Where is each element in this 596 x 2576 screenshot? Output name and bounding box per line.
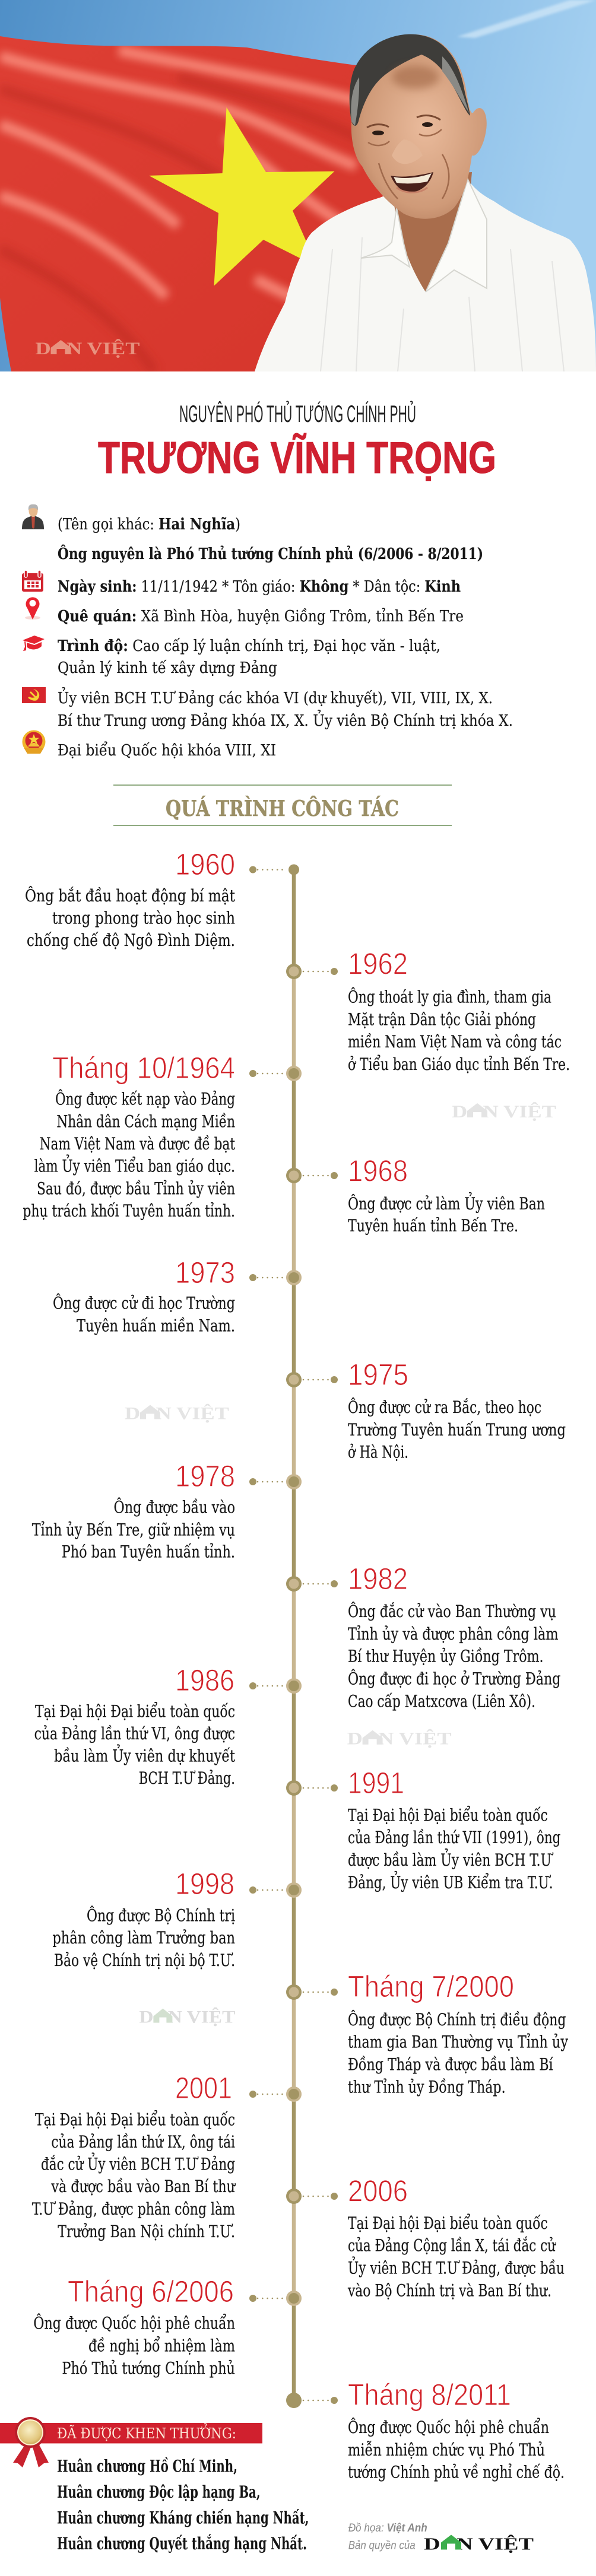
shirt <box>255 179 596 371</box>
credits <box>348 2522 534 2554</box>
waving flag <box>0 30 392 374</box>
timeline entry: 1986: của Đảng lần thứ VI, ông được <box>34 1724 235 1743</box>
timeline entry: 1998: 1998 <box>175 1867 234 1901</box>
timeline entry: June 2006: đề nghị bổ nhiệm làm <box>88 2336 235 2356</box>
timeline entry: 1975 <box>348 1358 566 1462</box>
timeline entry: 1960: trong phong trào học sinh <box>52 908 235 928</box>
timeline entry: July 2000 <box>348 1970 568 2097</box>
icon: person <box>22 504 44 529</box>
timeline entry: 2001: 2001 <box>175 2071 232 2105</box>
watermark: Dân Việt on photo: DÂN VIỆT <box>36 339 140 358</box>
forehead shade <box>392 65 439 89</box>
timeline entry: October 1964: Sau đó, được bầu Tỉnh ủy viên <box>37 1179 235 1198</box>
timeline entry: October 1964: làm Ủy viên Tiểu ban giáo dục. <box>34 1154 235 1176</box>
section heading: work history: QUÁ TRÌNH CÔNG TÁC <box>166 796 399 821</box>
timeline entry: June 2006: Tháng 6/2006 <box>68 2275 234 2308</box>
title: TRƯƠNG VĨNH TRỌNG <box>98 433 496 482</box>
timeline entry: 1998: phân công làm Trưởng ban <box>52 1928 235 1948</box>
hero photo: flag and portrait <box>0 0 596 374</box>
panel: personal information <box>22 504 513 760</box>
icon: calendar <box>22 570 43 592</box>
timeline entry: 1982: 1982 <box>348 1562 408 1596</box>
panel: personal information: Bí thư Trung ương Đảng khóa IX, X. Ủy viên Bộ Chính trị khóa X. <box>58 709 513 730</box>
timeline entry: 1960: 1960 <box>175 847 235 881</box>
awards heading: ĐÃ ĐƯỢC KHEN THƯỞNG: <box>57 2423 236 2442</box>
timeline entry: 1982 <box>348 1562 560 1711</box>
awards banner <box>0 2423 262 2444</box>
timeline entry: 1973: 1973 <box>175 1256 235 1289</box>
timeline entry: 1960: Ông bắt đầu hoạt động bí mật <box>25 885 236 906</box>
icon: location pin <box>25 597 40 620</box>
timeline entry: October 1964: Nam Việt Nam và được đề bạt <box>40 1134 236 1154</box>
light beam <box>457 0 596 38</box>
timeline entry: July 2000: thư Tỉnh ủy Đồng Tháp. <box>348 2077 506 2097</box>
eyes <box>372 131 384 135</box>
national assembly: Đại biểu Quốc hội khóa VIII, XI <box>58 741 276 760</box>
birth, religion, ethnicity: Ngày sinh: 11/11/1942 * Tôn giáo: Không * Dân tộc: Kinh <box>58 578 461 596</box>
timeline entry: October 1964: Nhân dân Cách mạng Miền <box>56 1112 235 1131</box>
timeline entry: 1975: ở Hà Nội. <box>348 1443 408 1462</box>
mouth <box>391 172 433 192</box>
watermark: Dân Việt: DÂN VIỆT <box>452 1102 556 1122</box>
timeline entry: 2001: đắc cử Ủy viên BCH T.Ư Đảng <box>41 2152 235 2174</box>
portrait of the man <box>255 34 596 371</box>
icon: party flag <box>22 687 46 703</box>
timeline entry: 1962: 1962 <box>348 947 408 980</box>
timeline entry: 1968: Tuyên huấn tỉnh Bến Tre. <box>348 1216 518 1235</box>
timeline entry: October 1964: phụ trách khối Tuyên huấn tỉnh. <box>23 1201 235 1221</box>
icon: national emblem <box>23 730 45 754</box>
timeline axis <box>249 864 338 2408</box>
timeline entry: August 2011: miễn nhiệm chức vụ Phó Thủ <box>348 2440 545 2460</box>
timeline entry: 2006 <box>347 2174 565 2300</box>
timeline entry: 1978: Ông được bầu vào <box>114 1497 235 1517</box>
timeline entry: 2001: Trưởng Ban Nội chính T.Ư. <box>58 2222 235 2241</box>
hair <box>350 34 470 126</box>
award list: Huân chương Hồ Chí Minh, <box>57 2457 237 2476</box>
timeline entry: June 2006 <box>33 2275 235 2378</box>
award list: Huân chương Quyết thắng hạng Nhất. <box>57 2534 307 2553</box>
icon: medal <box>13 2417 49 2467</box>
award list <box>57 2457 309 2553</box>
timeline entry: August 2011: Ông được Quốc hội phê chuẩn <box>348 2417 549 2437</box>
right-side nodes <box>286 964 338 2408</box>
timeline entry: 1962 <box>348 947 570 1074</box>
timeline entry: 1975: 1975 <box>348 1358 408 1392</box>
education: Trình độ: Cao cấp lý luận chính trị, Đại học văn - luật, <box>58 637 440 655</box>
timeline entry: 1968 <box>348 1154 545 1235</box>
timeline entry: 1978: Phó ban Tuyên huấn tỉnh. <box>62 1542 235 1562</box>
timeline entry: 2001 <box>32 2071 236 2241</box>
neck <box>394 172 472 291</box>
timeline entry: June 2006: Phó Thủ tướng Chính phủ <box>62 2358 235 2378</box>
timeline entry: 1998: Ông được Bộ Chính trị <box>87 1905 235 1925</box>
timeline entry: 2001: Tại Đại hội Đại biểu toàn quốc <box>35 2110 235 2129</box>
timeline entry: August 2011: Tháng 8/2011 <box>348 2378 511 2412</box>
timeline entry: 1998 <box>52 1867 235 1970</box>
panel: personal information: Quản lý kinh tế xây dựng Đảng <box>58 659 277 677</box>
watermark: Dân Việt: DÂN VIỆT <box>347 1729 452 1749</box>
award list: Huân chương Độc lập hạng Ba, <box>57 2482 261 2502</box>
timeline entry: 1960: chống chế độ Ngô Đình Diệm. <box>27 930 235 950</box>
timeline entry: 1986 <box>34 1663 236 1788</box>
timeline entry: 1968: Ông được cử làm Ủy viên Ban <box>348 1192 545 1214</box>
face <box>350 34 487 219</box>
timeline entry: June 2006: Ông được Quốc hội phê chuẩn <box>33 2313 235 2333</box>
timeline entry: 2001: T.Ư Đảng, được phân công làm <box>32 2199 235 2219</box>
timeline entry: 1973: Ông được cử đi học Trường <box>53 1292 235 1313</box>
panel: awards <box>0 2417 309 2553</box>
timeline entry: 1973: Tuyên huấn miền Nam. <box>77 1316 235 1335</box>
timeline entry: October 1964 <box>23 1051 236 1221</box>
timeline entry: 1978: Tỉnh ủy Bến Tre, giữ nhiệm vụ <box>32 1520 235 1539</box>
timeline entry: 1978: 1978 <box>175 1459 235 1493</box>
graphic credit: Đồ họa: Việt Anh <box>348 2522 427 2534</box>
timeline entry: 1991: 1991 <box>348 1766 404 1800</box>
timeline entry: 1962: Mặt trận Dân tộc Giải phóng <box>348 1009 536 1029</box>
timeline entry: 1975: Ông được cử ra Bắc, theo học <box>348 1397 541 1417</box>
timeline entry: 1982: Bí thư Huyện ủy Giồng Trôm. <box>348 1647 544 1666</box>
sky background <box>0 0 596 371</box>
timeline entry: October 1964: Ông được kết nạp vào Đảng <box>55 1089 235 1109</box>
timeline entry: 1986: BCH T.Ư Đảng. <box>139 1768 235 1788</box>
nose <box>392 140 419 164</box>
copyright: Bản quyền của <box>348 2540 416 2552</box>
timeline entry: 1973 <box>53 1256 235 1335</box>
flag star <box>149 107 335 286</box>
icon: graduation cap <box>23 636 45 651</box>
position: Ông nguyên là Phó Thủ tướng Chính phủ (6/2006 - 8/2011) <box>58 544 483 563</box>
timeline entry: 2006: 2006 <box>348 2174 408 2207</box>
timeline entry: 1986: bầu làm Ủy viên dự khuyết <box>54 1743 236 1765</box>
watermark: Dân Việt: DÂN VIỆT <box>125 1404 229 1423</box>
timeline entry: 2001: của Đảng lần thứ IX, ông tái <box>51 2132 235 2152</box>
party roles: Ủy viên BCH T.Ư Đảng các khóa VI (dự khuyết), VII, VIII, IX, X. <box>58 687 493 707</box>
award list: Huân chương Kháng chiến hạng Nhất, <box>57 2508 309 2527</box>
timeline entry: 1998: Bảo vệ Chính trị nội bộ T.Ư. <box>54 1951 235 1970</box>
timeline entry: 2001: và được bầu vào Ban Bí thư <box>51 2177 236 2196</box>
timeline entry: 1986: Tại Đại hội Đại biểu toàn quốc <box>35 1702 235 1721</box>
timeline entry: 1982: Cao cấp Matxcơva (Liên Xô). <box>348 1691 535 1711</box>
timeline entry: 1986: 1986 <box>175 1663 234 1697</box>
timeline entry: 1991 <box>348 1766 560 1892</box>
timeline entry: 1968: 1968 <box>348 1154 408 1188</box>
timeline entry: 1978 <box>32 1459 235 1562</box>
timeline entry: August 2011 <box>348 2378 565 2482</box>
logo: Dân Việt: DÂN VIỆT <box>424 2534 534 2554</box>
alternate name: (Tên gọi khác: Hai Nghĩa) <box>58 516 240 533</box>
timeline entry: October 1964: Tháng 10/1964 <box>52 1051 235 1085</box>
collar <box>361 179 487 292</box>
timeline entry: July 2000: Tháng 7/2000 <box>348 1970 514 2003</box>
watermark: Dân Việt: DÂN VIỆT <box>139 2008 235 2027</box>
timeline entry: 1960 <box>25 847 236 950</box>
hometown: Quê quán: Xã Bình Hòa, huyện Giồng Trôm, tỉnh Bến Tre <box>58 608 464 625</box>
left-side nodes <box>249 864 302 2306</box>
